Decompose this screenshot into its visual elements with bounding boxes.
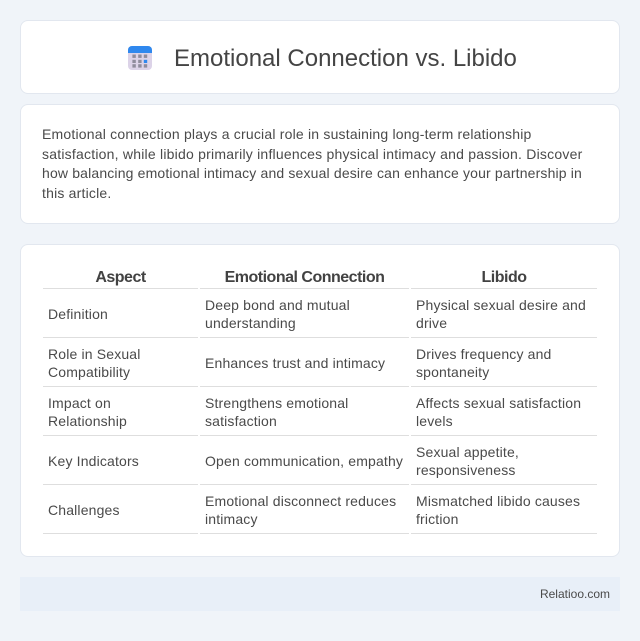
row: key indicators: Sexual appetite, bbox=[416, 444, 519, 460]
row: role in sexual compatibility: Drives frequency and bbox=[416, 346, 552, 362]
row: definition: drive bbox=[416, 315, 447, 331]
row: challenges: Emotional disconnect reduces bbox=[205, 493, 396, 509]
table panel bbox=[20, 244, 620, 557]
row: impact on relationship: Strengthens emotional bbox=[205, 395, 348, 411]
footer text: Relatioo.com bbox=[540, 587, 610, 601]
row: definition: understanding bbox=[205, 315, 296, 331]
title: Emotional Connection vs. Libido bbox=[174, 45, 517, 72]
row: impact on relationship: levels bbox=[416, 413, 453, 429]
icon: calendar bbox=[128, 46, 152, 70]
row: role in sexual compatibility bbox=[48, 346, 552, 380]
row: impact on relationship: Affects sexual satisfaction bbox=[416, 395, 581, 411]
intro panel bbox=[20, 104, 620, 224]
row: role in sexual compatibility: Compatibility bbox=[48, 364, 130, 380]
row: role in sexual compatibility: spontaneity bbox=[416, 364, 489, 380]
row: challenges: friction bbox=[416, 511, 459, 527]
row: impact on relationship: Impact on bbox=[48, 395, 111, 411]
row: impact on relationship bbox=[48, 395, 581, 429]
intro text: Emotional connection plays a crucial role in sustaining long-term relationship bbox=[42, 126, 532, 142]
row: key indicators: Key Indicators bbox=[48, 453, 139, 469]
row: challenges: intimacy bbox=[205, 511, 258, 527]
header panel bbox=[20, 20, 620, 94]
row: definition: Definition bbox=[48, 306, 108, 322]
row: impact on relationship: Relationship bbox=[48, 413, 127, 429]
row: challenges: Mismatched libido causes bbox=[416, 493, 580, 509]
row: key indicators: responsiveness bbox=[416, 462, 516, 478]
row: key indicators: Open communication, empathy bbox=[205, 453, 403, 469]
row: definition: Physical sexual desire and bbox=[416, 297, 586, 313]
intro text: satisfaction, while libido primarily influences physical intimacy and passion. Discover bbox=[42, 146, 582, 162]
row: definition bbox=[48, 297, 586, 331]
row: challenges bbox=[48, 493, 580, 527]
footer bar bbox=[20, 577, 620, 611]
row: challenges: Challenges bbox=[48, 502, 120, 518]
intro text: this article. bbox=[42, 185, 112, 201]
column headings: Emotional Connection bbox=[225, 269, 384, 286]
intro text: how balancing emotional intimacy and sexual desire can enhance your partnership in bbox=[42, 165, 582, 181]
row: role in sexual compatibility: Enhances trust and intimacy bbox=[205, 355, 385, 371]
intro text bbox=[42, 126, 582, 201]
row: definition: Deep bond and mutual bbox=[205, 297, 350, 313]
row: impact on relationship: satisfaction bbox=[205, 413, 277, 429]
column headings bbox=[95, 269, 526, 286]
row: role in sexual compatibility: Role in Sexual bbox=[48, 346, 141, 362]
row: key indicators bbox=[48, 444, 519, 478]
column headings: Libido bbox=[482, 269, 526, 286]
column headings: Aspect bbox=[95, 269, 146, 286]
